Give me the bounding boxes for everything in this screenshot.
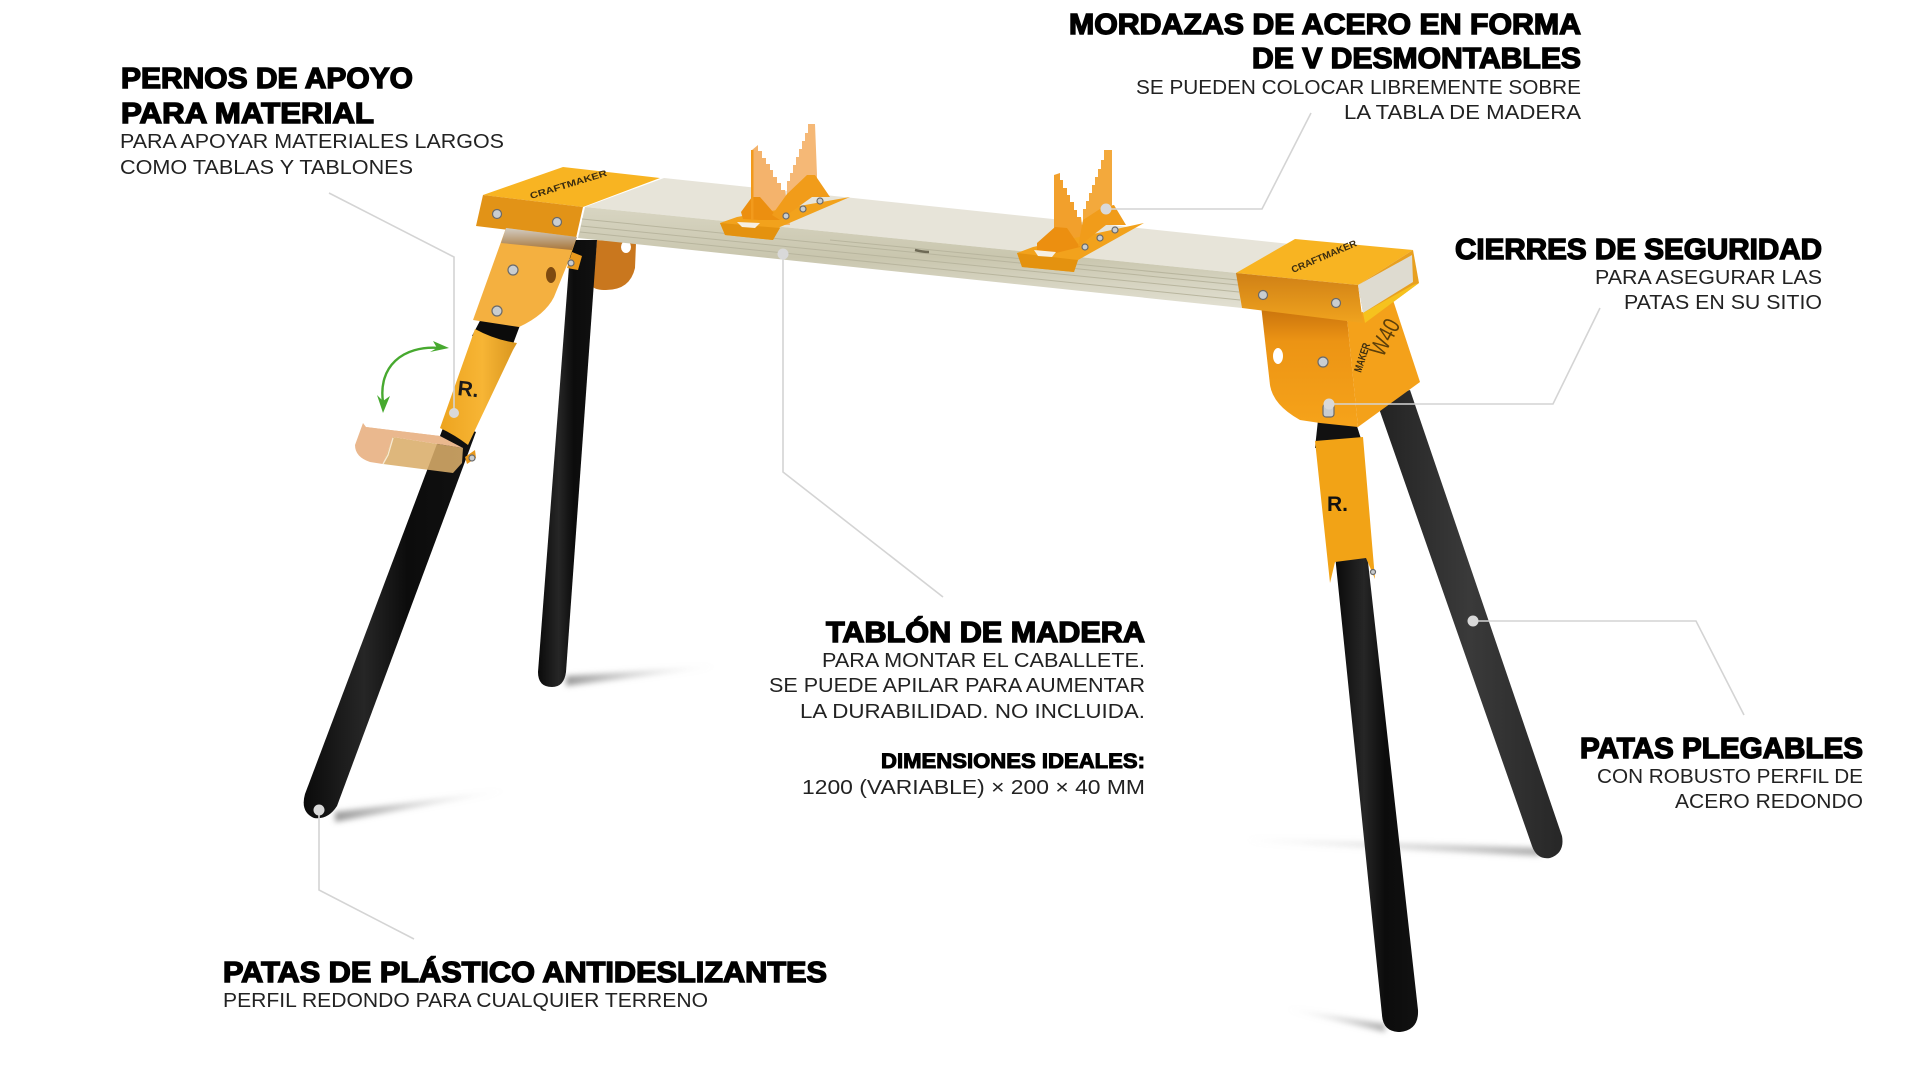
callout: patas plegables [1580,733,1863,813]
callout: tablon de madera: PARA MONTAR EL CABALLETE. [822,649,1145,672]
right sleeve: R. [1327,493,1348,516]
jaw right [1017,150,1144,272]
leg: rear right [1376,390,1562,858]
callout: patas plegables: ACERO REDONDO [1675,790,1863,813]
leg: upper front left [472,315,522,352]
left end cap [476,167,660,238]
left sleeve: R. [456,377,480,402]
callout: patas plegables: PATAS PLEGABLES [1580,733,1863,765]
callout: mordazas [1069,9,1581,124]
leg: front right [1335,553,1418,1032]
right end cap [1236,238,1419,323]
right hinge plate: MAKER [1352,342,1373,374]
callout: patas de plastico: PERFIL REDONDO PARA CUALQUIER TERRENO [223,989,708,1012]
rear left bracket [593,240,636,290]
right sleeve [1315,437,1376,583]
jaw left [720,124,850,240]
callout: pernos de apoyo: PERNOS DE APOYO [121,63,413,95]
callout: patas de plastico [223,955,827,1012]
callout lines and dots [314,113,1744,939]
callout: tablon de madera [769,615,1145,799]
right hinge plate: W40 [1364,315,1406,361]
callout: mordazas: SE PUEDEN COLOCAR LIBREMENTE SOBRE [1136,76,1581,99]
callout: patas plegables: CON ROBUSTO PERFIL DE [1597,765,1863,788]
left end cap: CRAFTMAKER [529,168,609,201]
callout: tablon de madera: TABLÓN DE MADERA [826,615,1145,649]
callout: pernos de apoyo [120,63,504,179]
right hinge plate [1261,300,1420,427]
callout: mordazas: DE V DESMONTABLES [1252,43,1581,75]
left sleeve [440,329,517,464]
callout: tablon de madera: SE PUEDE APILAR PARA AUMENTAR [769,674,1145,697]
callout: pernos de apoyo: PARA APOYAR MATERIALES LARGOS [120,130,504,153]
callout: tablon de madera: LA DURABILIDAD. NO INCLUIDA. [800,700,1145,723]
right end cap: CRAFTMAKER [1290,238,1359,276]
callout: cierres de seguridad [1455,234,1822,314]
callout: cierres de seguridad: PARA ASEGURAR LAS [1595,266,1822,289]
folded foot plate [355,423,463,473]
left hinge plate [473,228,582,327]
leg: front left [304,420,476,818]
sawhorse illustration [304,124,1562,1032]
leg: front right upper [1315,420,1363,448]
callout: cierres de seguridad: PATAS EN SU SITIO [1624,291,1822,314]
callout: mordazas: LA TABLA DE MADERA [1344,101,1581,124]
callout: pernos de apoyo: COMO TABLAS Y TABLONES [120,156,413,179]
arrow: folding direction [377,341,449,413]
callout: patas de plastico: PATAS DE PLÁSTICO ANTIDESLIZANTES [223,955,827,989]
callout: tablon de madera: DIMENSIONES IDEALES: [881,750,1145,773]
leg: rear left [538,240,597,687]
callout: pernos de apoyo: PARA MATERIAL [121,98,374,130]
callout: cierres de seguridad: CIERRES DE SEGURIDAD [1455,234,1822,266]
plank [578,178,1290,308]
floor shadows [335,666,1540,1032]
callout: tablon de madera: 1200 (VARIABLE) × 200 × 40 MM [802,776,1145,799]
callout: mordazas: MORDAZAS DE ACERO EN FORMA [1069,9,1581,41]
